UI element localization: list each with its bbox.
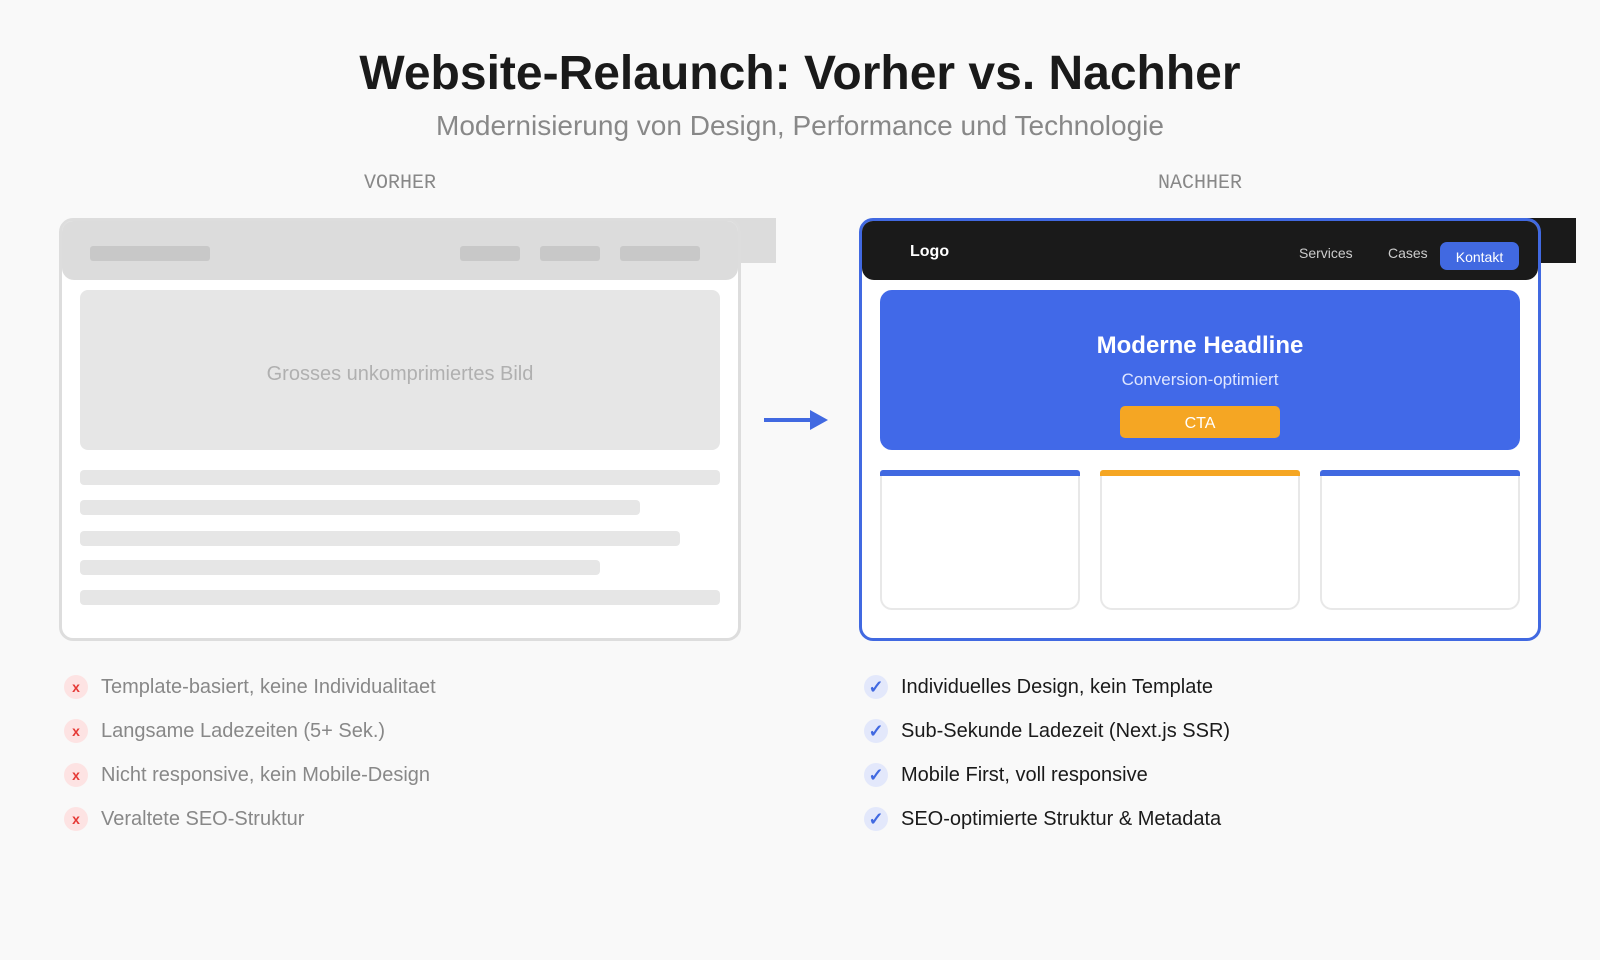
list: vorher cons: Veraltete SEO-Struktur — [101, 808, 304, 830]
list: vorher cons — [64, 675, 436, 831]
label: nachher: NACHHER — [1158, 172, 1242, 195]
panel: vorher mockup — [59, 218, 776, 641]
list: nachher pros: Mobile First, voll responsive — [901, 764, 1148, 786]
list: nachher pros: Sub-Sekunde Ladezeit (Next.js SSR) — [901, 720, 1230, 742]
list: nachher pros: ✓ — [868, 808, 884, 828]
nav items: Services — [1299, 245, 1353, 261]
list: nachher pros: Individuelles Design, kein Template — [901, 676, 1213, 698]
list: vorher cons: x — [72, 767, 80, 783]
hero — [880, 290, 1520, 450]
panel: nachher mockup — [859, 218, 1576, 641]
nav overflow block — [1519, 218, 1576, 263]
list: nachher pros: SEO-optimierte Struktur & Metadata — [901, 808, 1221, 830]
list: vorher cons: Template-basiert, keine Individualitaet — [101, 676, 436, 698]
list: nachher pros: ✓ — [868, 720, 884, 740]
cards — [880, 470, 1520, 610]
subtitle: Modernisierung von Design, Performance und Technologie — [436, 110, 1164, 141]
list: vorher cons: Nicht responsive, kein Mobile-Design — [101, 764, 430, 786]
text lines — [80, 470, 720, 605]
list: vorher cons: x — [72, 723, 80, 739]
hero: Conversion-optimiert — [1122, 370, 1278, 389]
title: Website-Relaunch: Vorher vs. Nachher — [359, 47, 1241, 100]
list: vorher cons: x — [72, 679, 80, 695]
image placeholder — [80, 290, 720, 450]
nav items: Kontakt — [1456, 249, 1503, 265]
arrow — [764, 410, 828, 430]
nav items: Cases — [1388, 245, 1428, 261]
hero: CTA — [1185, 415, 1215, 432]
list: nachher pros: ✓ — [868, 676, 884, 696]
list: nachher pros — [864, 675, 1230, 831]
header bar — [62, 221, 738, 280]
header overflow block — [719, 218, 776, 263]
image placeholder: Grosses unkomprimiertes Bild — [267, 362, 533, 384]
hero: Moderne Headline — [1097, 332, 1303, 359]
nav items: Logo — [910, 243, 949, 260]
list: vorher cons: x — [72, 811, 80, 827]
label: vorher: VORHER — [364, 172, 436, 195]
nav items — [910, 242, 1519, 270]
list: nachher pros: ✓ — [868, 764, 884, 784]
nav bar — [862, 221, 1538, 280]
list: vorher cons: Langsame Ladezeiten (5+ Sek.) — [101, 720, 385, 742]
